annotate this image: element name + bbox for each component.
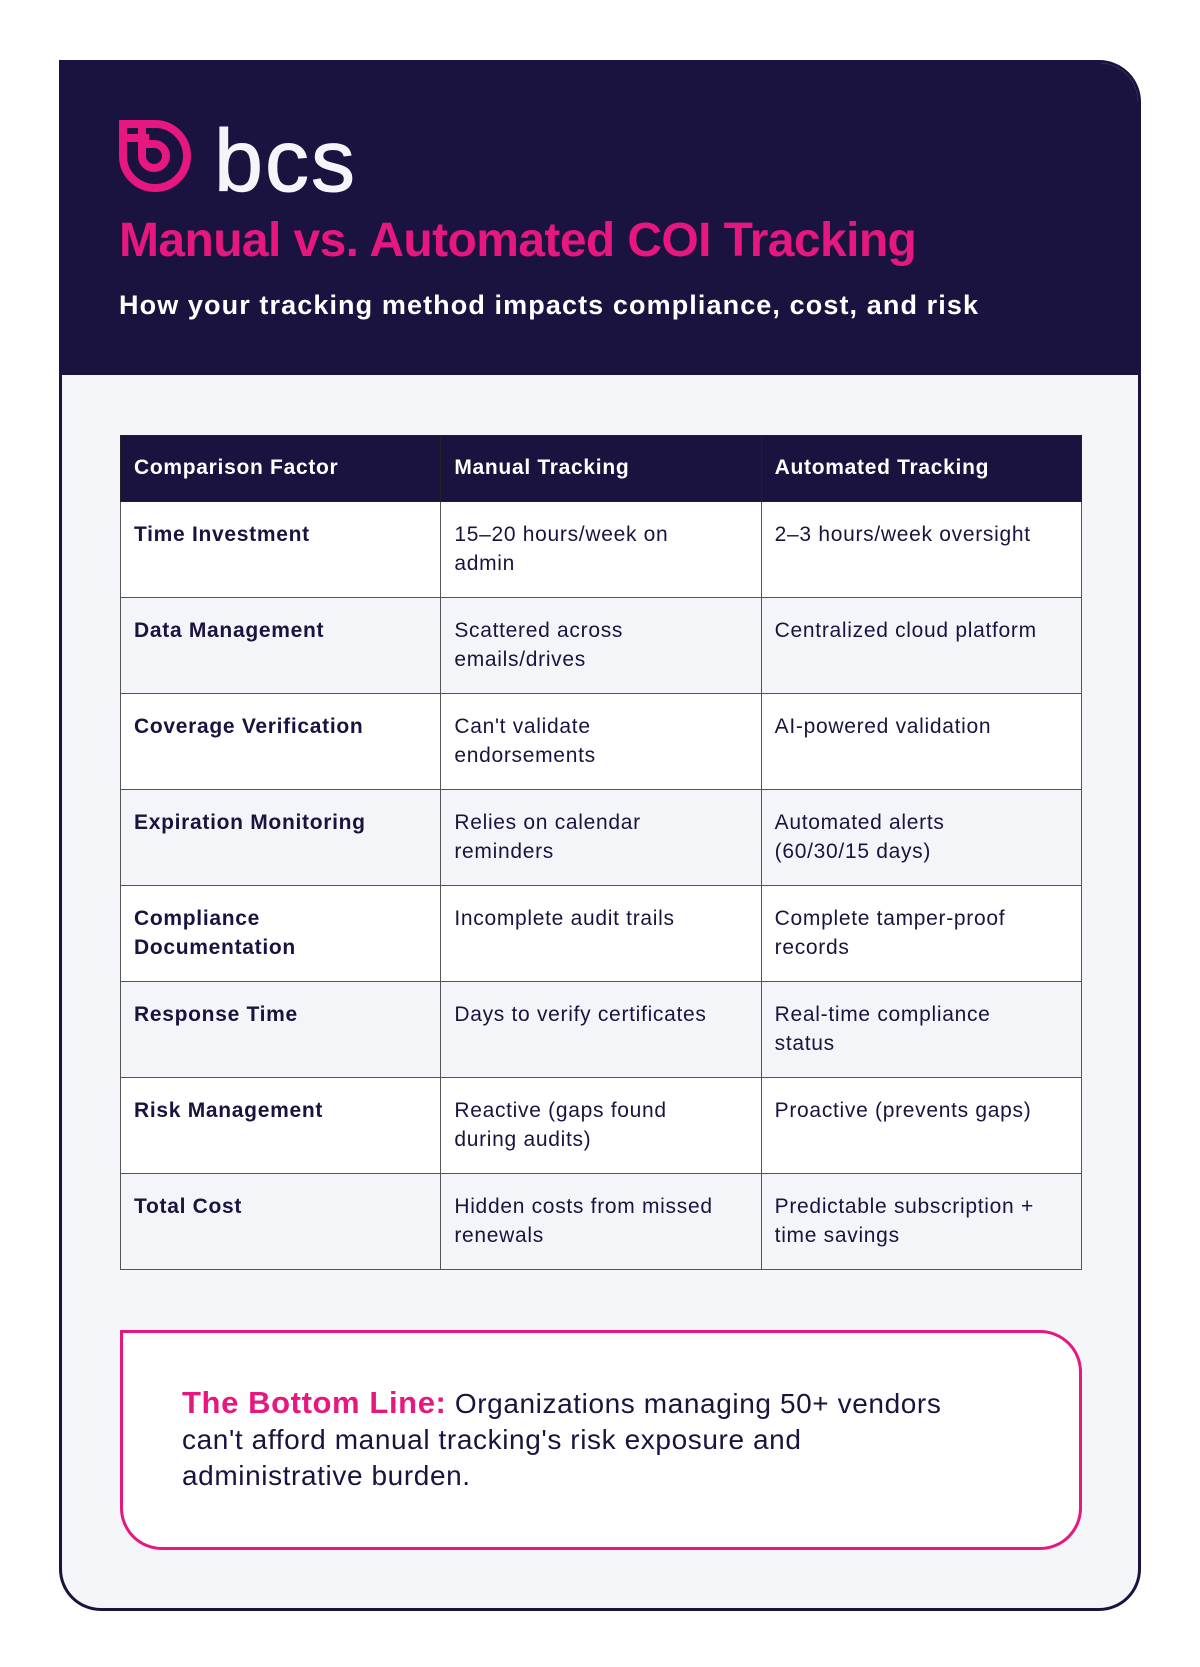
- comparison table: records: [775, 936, 850, 959]
- comparison table: during audits): [454, 1128, 591, 1151]
- callout: bottom line: The Bottom Line: Organizations managing 50+ vendors: [182, 1385, 941, 1420]
- subtitle: How your tracking method impacts compliance, cost, and risk: [119, 290, 979, 320]
- comparison table: Scattered across: [454, 619, 623, 642]
- comparison table: 2–3 hours/week oversight: [775, 523, 1031, 546]
- comparison table: Automated alerts: [775, 811, 945, 834]
- comparison table: admin: [454, 552, 515, 575]
- comparison table: Comparison Factor: [134, 456, 338, 479]
- comparison table: Automated Tracking: [775, 456, 989, 479]
- comparison table: Proactive (prevents gaps): [775, 1099, 1031, 1122]
- comparison table: Incomplete audit trails: [454, 907, 675, 930]
- comparison table: endorsements: [454, 744, 596, 767]
- comparison table: reminders: [454, 840, 554, 863]
- comparison table: time savings: [775, 1224, 900, 1247]
- comparison table: Real-time compliance: [775, 1003, 991, 1026]
- comparison table: 15–20 hours/week on: [454, 523, 668, 546]
- comparison table: Manual Tracking: [454, 456, 629, 479]
- comparison table: AI-powered validation: [775, 715, 991, 738]
- comparison table: Risk Management: [134, 1099, 323, 1122]
- comparison table: (60/30/15 days): [775, 840, 931, 863]
- comparison table: Complete tamper-proof: [775, 907, 1005, 930]
- comparison table: Total Cost: [134, 1195, 242, 1218]
- comparison table: Relies on calendar: [454, 811, 641, 834]
- comparison table: Predictable subscription +: [775, 1195, 1034, 1218]
- icon: bcs mark: [123, 124, 187, 188]
- comparison table: Centralized cloud platform: [775, 619, 1037, 642]
- title: Manual vs. Automated COI Tracking: [119, 214, 916, 267]
- comparison table: Days to verify certificates: [454, 1003, 707, 1026]
- comparison table: [120, 435, 1082, 1270]
- comparison table: Reactive (gaps found: [454, 1099, 667, 1122]
- comparison table: Expiration Monitoring: [134, 811, 366, 834]
- header panel: [62, 63, 1138, 375]
- comparison table: Compliance: [134, 907, 260, 930]
- callout: bottom line: can't afford manual tracking's risk exposure and: [182, 1424, 802, 1455]
- comparison table: Documentation: [134, 936, 296, 959]
- callout: bottom line: administrative burden.: [182, 1460, 471, 1491]
- comparison table: emails/drives: [454, 648, 586, 671]
- comparison table: renewals: [454, 1224, 544, 1247]
- comparison table: Time Investment: [134, 523, 310, 546]
- logo: [119, 120, 357, 200]
- comparison table: Coverage Verification: [134, 715, 363, 738]
- comparison table: Response Time: [134, 1003, 298, 1026]
- comparison table: Hidden costs from missed: [454, 1195, 713, 1218]
- comparison table: Data Management: [134, 619, 324, 642]
- comparison table: Can't validate: [454, 715, 591, 738]
- comparison table: status: [775, 1032, 835, 1055]
- callout: bottom line: [120, 1330, 1082, 1550]
